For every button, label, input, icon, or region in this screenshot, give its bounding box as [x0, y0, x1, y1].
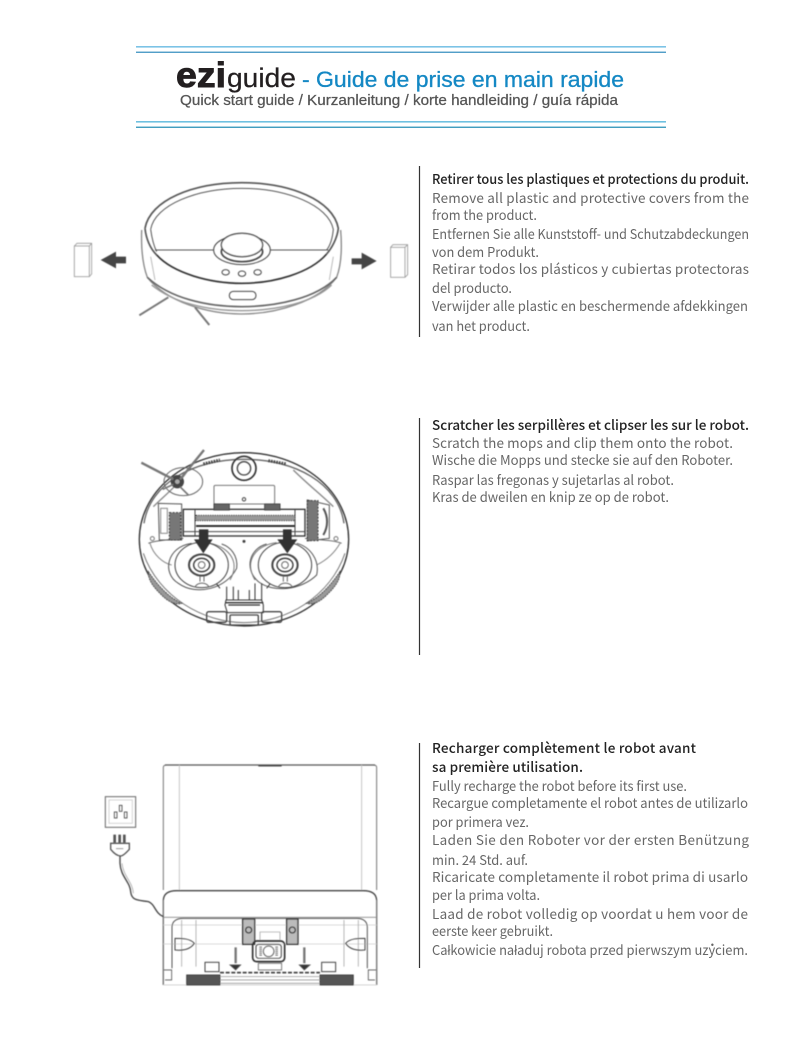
protective cover left — [74, 243, 92, 277]
main brush — [183, 504, 305, 542]
step 2 text panel — [420, 414, 749, 655]
heading: Retirer tous les plastiques et protections du produit. — [432, 168, 749, 188]
body lines: Wische die Mopps und stecke sie auf den Roboter. — [432, 449, 733, 469]
step 3 text panel — [420, 737, 749, 968]
arrow left — [194, 529, 213, 553]
plug and cable — [111, 835, 163, 917]
body lines: from the product. — [432, 204, 537, 224]
body lines: Retirar todos los plásticos y cubiertas protectoras — [432, 258, 749, 278]
vents — [148, 572, 340, 604]
body lines: Recargue completamente el robot antes de utilizarlo — [432, 792, 748, 812]
illustration: charging station with plug — [105, 765, 377, 985]
body lines — [432, 432, 733, 506]
body lines: von dem Produkt. — [432, 241, 539, 261]
mop right — [250, 542, 317, 589]
robot underside body — [139, 453, 349, 626]
dock connector — [207, 583, 282, 625]
body lines: del producto. — [432, 277, 512, 297]
heading: sa première utilisation. — [432, 756, 583, 776]
title: ezi — [176, 56, 226, 95]
step 1 text panel — [420, 166, 749, 337]
side brush — [141, 450, 204, 496]
title: guide: guide — [227, 63, 296, 93]
body lines: Raspar las fregonas y sujetarlas al robot. — [432, 469, 674, 489]
body lines — [432, 775, 749, 959]
body lines: Całkowicie naładuj robota przed pierwszym użyciem. — [432, 939, 748, 959]
body lines: Remove all plastic and protective covers from the — [432, 187, 749, 207]
wall socket — [105, 797, 136, 827]
wheel right — [307, 500, 329, 541]
subtitle: Quick start guide / Kurzanleitung / korte handleiding / guía rápida — [180, 93, 619, 109]
arrow right — [352, 253, 377, 269]
body lines: Laad de robot volledig op voordat u hem voor de — [432, 903, 748, 923]
side brushes — [139, 297, 209, 325]
arrow left — [101, 252, 126, 268]
body lines — [432, 187, 749, 335]
body lines: por primera vez. — [432, 811, 529, 831]
body lines: eerste keer gebruikt. — [432, 920, 553, 940]
body lines: Kras de dweilen en knip ze op de robot. — [432, 486, 669, 506]
body lines: Verwijder alle plastic en beschermende afdekkingen — [432, 295, 748, 315]
heading: Recharger complètement le robot avant — [432, 737, 697, 757]
body lines: van het product. — [432, 315, 530, 335]
body lines: per la prima volta. — [432, 884, 540, 904]
robot body — [142, 183, 341, 314]
heading — [432, 737, 697, 776]
illustration: robot top view with covers removed — [74, 183, 408, 325]
arrow right — [277, 529, 297, 553]
title: french subtitle: - Guide de prise en main rapide — [302, 67, 624, 92]
wheel left — [158, 503, 182, 540]
body lines: min. 24 Std. auf. — [432, 849, 528, 869]
mop left — [169, 542, 237, 590]
body lines: Fully recharge the robot before its first use. — [432, 775, 687, 795]
body lines: Laden Sie den Roboter vor der ersten Benützung — [432, 829, 749, 849]
dock base — [163, 891, 377, 985]
illustration: robot underside with mops — [139, 450, 349, 626]
protective cover right — [391, 245, 408, 277]
body lines: Ricaricate completamente il robot prima di usarlo — [432, 866, 748, 886]
body lines: Scratch the mops and clip them onto the robot. — [432, 432, 733, 452]
heading: Scratcher les serpillères et clipser les sur le robot. — [432, 414, 749, 434]
robot in dock — [172, 918, 367, 972]
mop strip — [164, 970, 376, 985]
dock tower — [163, 765, 377, 890]
body lines: Entfernen Sie alle Kunststoff- und Schutzabdeckungen — [432, 223, 749, 243]
header — [136, 46, 666, 128]
